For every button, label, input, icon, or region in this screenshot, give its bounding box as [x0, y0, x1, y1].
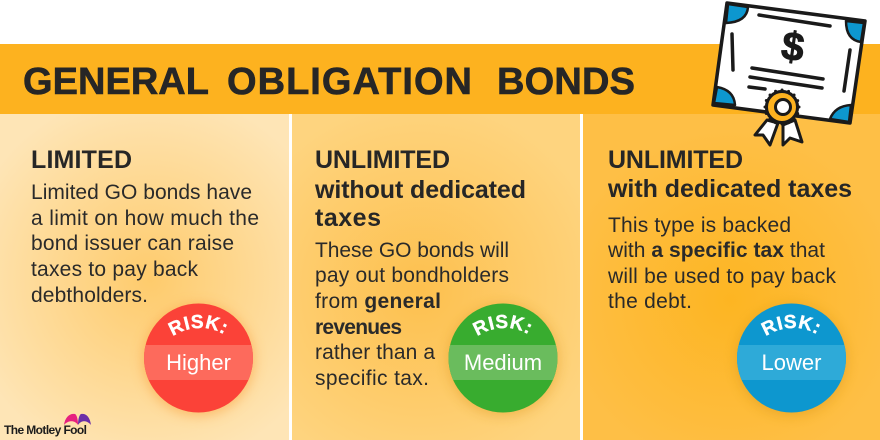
heading: unlimited without dedicated taxes: taxes: [315, 204, 381, 232]
badge: risk medium: RISK:: [472, 314, 532, 336]
title: [23, 61, 635, 103]
heading: limited: LIMITED: [31, 146, 132, 174]
panel: unlimited without dedicated taxes: [292, 114, 580, 440]
text block: limited description: bond issuer can raise: [31, 232, 234, 255]
text block: specific tax description: This type is backed: [608, 214, 791, 237]
text block: specific tax description: [607, 214, 836, 313]
heading: unlimited without dedicated taxes: UNLIMITED: [315, 146, 450, 174]
icon: certificate: [713, 3, 865, 145]
text block: limited description: debtholders.: [31, 284, 148, 307]
text block: general revenues description: [315, 239, 509, 390]
title: OBLIGATION: [227, 61, 472, 103]
badge: risk higher: RISK:: [168, 314, 227, 336]
logo: The Motley Fool: [4, 414, 91, 437]
text block: general revenues description: specific tax.: [315, 367, 429, 390]
badge: risk higher: [138, 300, 260, 422]
panel: unlimited with dedicated taxes: [583, 114, 880, 440]
badge: risk medium: Medium: [464, 350, 542, 375]
badge: risk higher: Higher: [166, 350, 231, 375]
heading: unlimited with dedicated taxes: UNLIMITED: [608, 146, 743, 174]
title band: [0, 44, 880, 114]
title: BONDS: [497, 61, 635, 103]
text block: specific tax description: the debt.: [608, 290, 692, 313]
text block: limited description: [31, 181, 259, 307]
icon: certificate: $: [779, 24, 807, 70]
badge: risk lower: RISK:: [760, 314, 820, 336]
text block: limited description: taxes to pay back: [31, 258, 198, 281]
text block: limited description: Limited GO bonds have: [31, 181, 252, 204]
badge: risk lower: [736, 304, 848, 416]
heading: unlimited with dedicated taxes: [607, 146, 852, 203]
panel: limited: [0, 114, 289, 440]
text block: general revenues description: pay out bondholders: [315, 264, 509, 287]
text block: general revenues description: revenues: [315, 316, 402, 339]
text block: specific tax description: will be used to pay back: [607, 265, 836, 288]
title: GENERAL: [23, 61, 209, 103]
heading: unlimited with dedicated taxes: with dedicated taxes: [607, 175, 852, 203]
logo: The Motley Fool: The Motley Fool: [4, 423, 87, 437]
text block: limited description: a limit on how much the: [31, 207, 259, 230]
text block: general revenues description: from general: [315, 290, 441, 313]
text block: general revenues description: rather than a: [315, 341, 435, 364]
badge: risk medium: [444, 300, 564, 420]
badge: risk lower: Lower: [762, 350, 821, 375]
heading: unlimited without dedicated taxes: [314, 146, 526, 232]
heading: unlimited without dedicated taxes: without dedicated: [314, 176, 526, 204]
text block: specific tax description: with a specific tax that: [607, 239, 825, 262]
text block: general revenues description: These GO bonds will: [315, 239, 509, 262]
